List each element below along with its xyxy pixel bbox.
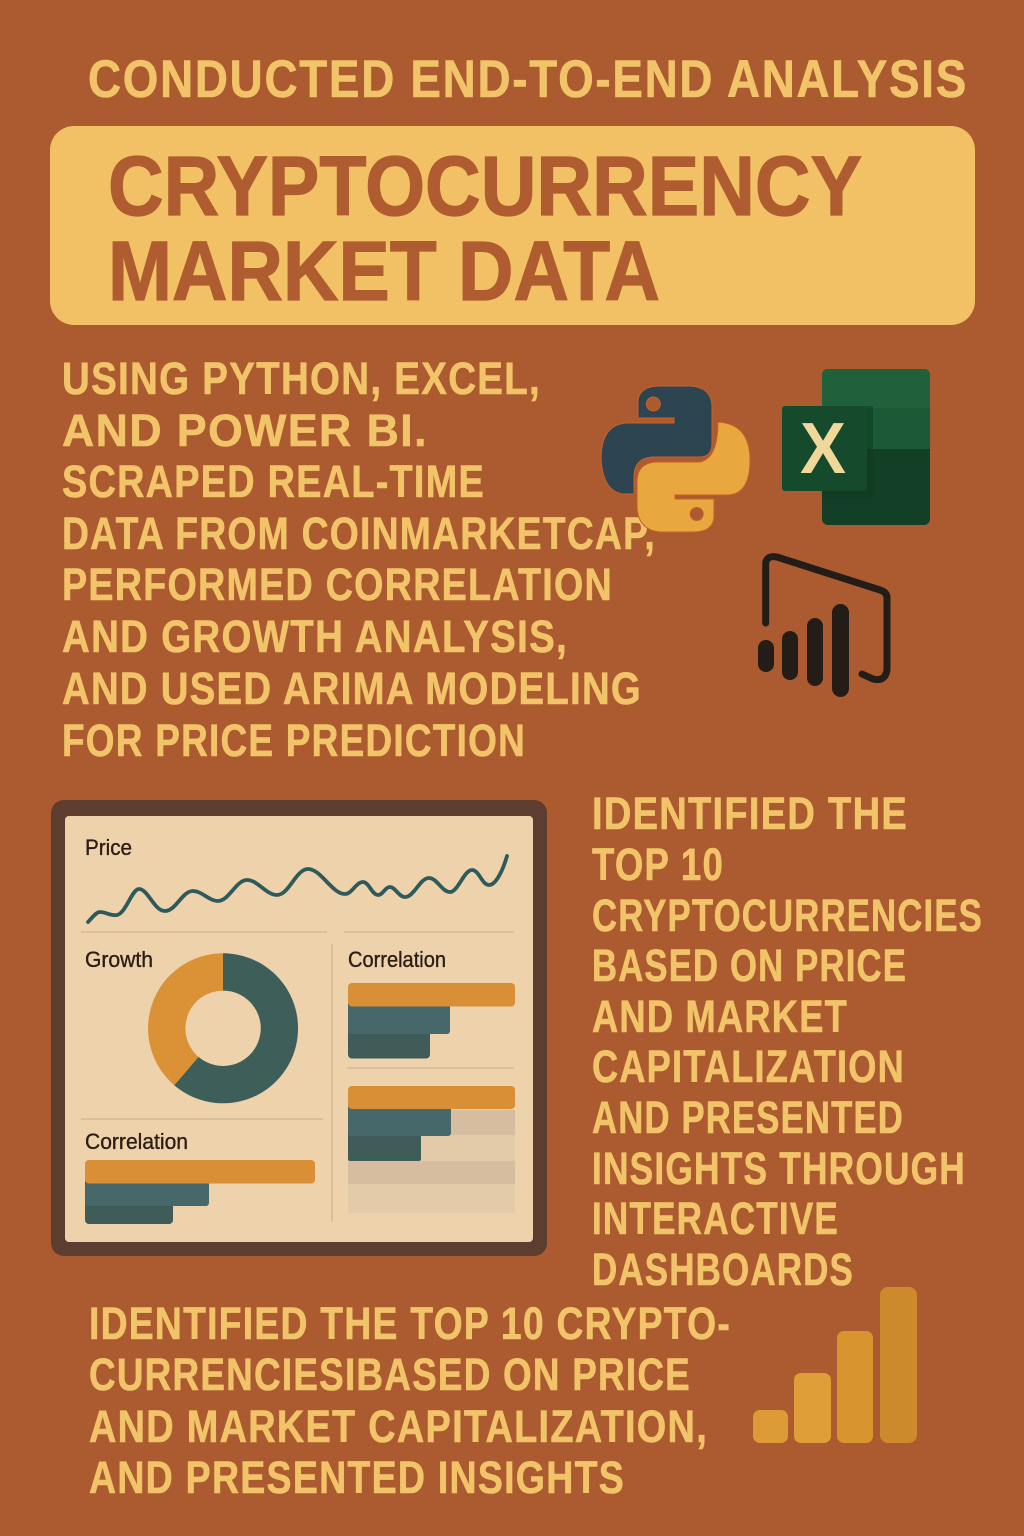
text block: top 10 cryptocurrencies: IDENTIFIED THE (592, 788, 908, 839)
text block: tools and methods: PERFORMED CORRELATION (62, 559, 613, 610)
icon: excel logo (782, 369, 930, 525)
text block: bottom summary (89, 1298, 731, 1503)
bar chart: correlation right top (348, 983, 515, 1058)
title banner: cryptocurrency market data: CRYPTOCURRENCY (108, 139, 862, 233)
text block: tools and methods: DATA FROM COINMARKETCAP, (62, 508, 656, 559)
title banner: cryptocurrency market data: MARKET DATA (108, 224, 660, 318)
text block: tools and methods: FOR PRICE PREDICTION (62, 715, 526, 766)
text block: top 10 cryptocurrencies: BASED ON PRICE (592, 940, 907, 991)
text block: top 10 cryptocurrencies: TOP 10 (592, 839, 724, 890)
text block: tools and methods: AND POWER BI. (62, 405, 428, 456)
donut chart: growth (148, 953, 298, 1103)
bar chart: correlation left (85, 1160, 315, 1224)
text block: top 10 cryptocurrencies: CAPITALIZATION (592, 1041, 905, 1092)
label: growth: Growth (85, 947, 153, 972)
text block: bottom summary: IDENTIFIED THE TOP 10 CRYPTO- (89, 1298, 731, 1349)
text block: top 10 cryptocurrencies: AND MARKET (592, 991, 848, 1042)
text block: tools and methods: AND USED ARIMA MODELING (62, 663, 642, 714)
text block: bottom summary: CURRENCIESIBASED ON PRICE (89, 1349, 691, 1400)
label: correlation left: Correlation (85, 1129, 188, 1154)
icon: rising bars (753, 1287, 917, 1443)
text block: bottom summary: AND PRESENTED INSIGHTS (89, 1452, 625, 1503)
text block: top 10 cryptocurrencies (592, 788, 983, 1295)
icon: excel logo: X (800, 409, 846, 489)
panel: dashboard (51, 800, 547, 1256)
title banner: cryptocurrency market data (50, 126, 975, 325)
text block: tools and methods (62, 353, 656, 766)
text block: bottom summary: AND MARKET CAPITALIZATION, (89, 1401, 708, 1452)
text block: top 10 cryptocurrencies: INTERACTIVE (592, 1193, 839, 1244)
icon: power bi logo (758, 557, 887, 697)
bar chart: correlation right bottom (348, 1086, 515, 1213)
text block: tools and methods: SCRAPED REAL-TIME (62, 456, 485, 507)
icon: python logo (601, 386, 750, 532)
text block: tools and methods: AND GROWTH ANALYSIS, (62, 611, 568, 662)
text block: tools and methods: USING PYTHON, EXCEL, (62, 353, 541, 404)
label: price: Price (85, 835, 132, 860)
label: correlation right: Correlation (348, 947, 446, 972)
text block: top 10 cryptocurrencies: AND PRESENTED (592, 1092, 904, 1143)
text block: top 10 cryptocurrencies: DASHBOARDS (592, 1244, 854, 1295)
line chart: price (88, 856, 507, 922)
